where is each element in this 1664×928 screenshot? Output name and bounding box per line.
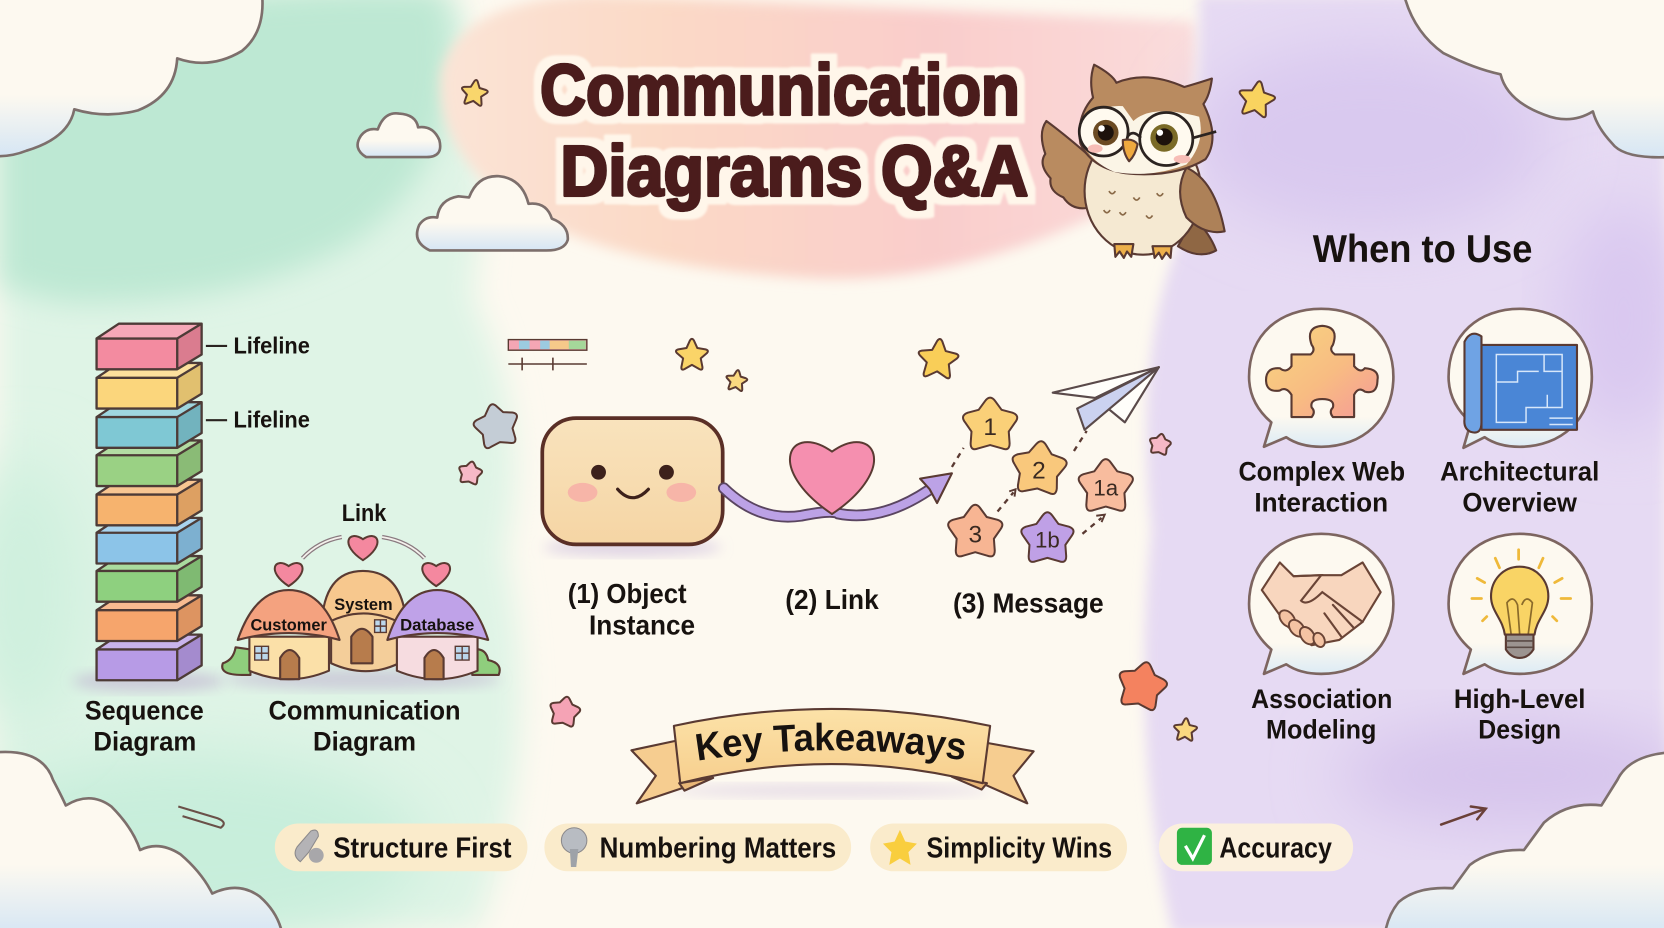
bubble: association modeling [1249, 534, 1393, 674]
part labels: (2) Link [785, 584, 879, 615]
owl right wing [1180, 168, 1225, 232]
numbered message stars: 1 [983, 414, 997, 441]
when-to-use labels [1238, 457, 1599, 745]
sequence diagram label [85, 696, 204, 756]
pill: structure first: Structure First [333, 832, 512, 864]
customer house [238, 590, 340, 679]
object instance character [542, 418, 723, 556]
when-to-use labels: Complex Web [1238, 457, 1405, 487]
key takeaways ribbon: Key Takeaways [696, 722, 965, 764]
database house [387, 590, 488, 679]
hearts and link arcs [275, 536, 450, 586]
sequence diagram label: Diagram [93, 726, 196, 756]
handshake [1262, 562, 1381, 649]
when-to-use labels: Architectural [1440, 457, 1599, 487]
pill: accuracy: Accuracy [1219, 832, 1332, 864]
when-to-use labels: High-Level [1454, 684, 1585, 714]
part labels: (1) Object [568, 578, 687, 609]
database house: Database [400, 616, 474, 634]
owl beak [1123, 140, 1138, 161]
when-to-use labels: Modeling [1266, 715, 1376, 745]
system house: System [334, 596, 393, 614]
small cloud [358, 113, 440, 157]
bubble: architectural overview [1449, 309, 1592, 448]
lifeline labels: Lifeline [233, 332, 310, 358]
part labels [568, 578, 1104, 641]
numbered message stars [948, 398, 1133, 562]
owl tail [1178, 218, 1216, 254]
communication diagram label [268, 696, 461, 756]
bubble: high-level design [1449, 534, 1592, 674]
when-to-use labels: Overview [1462, 488, 1577, 518]
numbered message stars: 1b [1035, 528, 1060, 553]
when-to-use labels: Association [1251, 684, 1392, 714]
pill: simplicity wins [870, 824, 1127, 871]
part labels: Instance [589, 610, 695, 641]
decorative stars [457, 78, 1277, 741]
panel: anatomy of a communication diagram [542, 367, 1159, 641]
part labels: (3) Message [953, 587, 1104, 618]
title: Diagrams Q&A [560, 132, 1028, 211]
owl feet [1114, 244, 1172, 259]
bubble: complex web interaction [1249, 309, 1393, 447]
customer house: Customer [250, 616, 327, 634]
mini sketch: lifeline strip [508, 340, 587, 370]
small arrow: bottom right [1441, 807, 1486, 825]
pill: numbering matters [544, 824, 851, 871]
numbered message stars: 1a [1093, 476, 1119, 501]
pill: simplicity wins: Simplicity Wins [926, 832, 1112, 864]
owl face [1080, 106, 1201, 174]
owl head [1079, 65, 1212, 174]
When to Use heading: When to Use [1313, 227, 1532, 271]
communication diagram label: Communication [268, 696, 461, 726]
panel: when to use [1238, 309, 1599, 745]
pill: numbering matters: Numbering Matters [600, 832, 836, 864]
lifeline labels: Lifeline [233, 407, 310, 433]
lifeline labels [206, 332, 310, 433]
owl chest feathers [1104, 191, 1163, 218]
corner cloud: top left [0, 0, 263, 156]
owl glasses and eyes [1079, 107, 1216, 166]
owl left wing [1042, 121, 1093, 208]
corner cloud: top right [1404, 0, 1664, 157]
key takeaways ribbon [630, 708, 1035, 804]
system house [322, 571, 406, 671]
corner cloud: bottom left [0, 752, 282, 928]
panel: sequence vs communication diagrams [72, 324, 501, 756]
owl body [1085, 127, 1201, 255]
owl mascot [1042, 65, 1225, 259]
small arrow: bottom left [178, 807, 224, 828]
dashed message arrows [952, 431, 1105, 534]
communication diagram label: Diagram [313, 726, 416, 756]
link arrow [724, 473, 952, 517]
pill: structure first [275, 824, 527, 871]
sequence diagram label: Sequence [85, 696, 204, 726]
corner cloud: bottom right [1385, 752, 1664, 928]
paper plane [1053, 367, 1159, 430]
heart: link [790, 442, 874, 514]
title [540, 52, 1028, 211]
large cloud [417, 176, 568, 250]
numbered message stars: 3 [968, 521, 982, 548]
sequence diagram block stack [72, 324, 225, 692]
takeaway pills [275, 824, 1353, 871]
title: Communication [540, 52, 1020, 131]
link label: Link [342, 500, 387, 527]
numbered message stars: 2 [1032, 458, 1046, 485]
pill: accuracy [1159, 824, 1353, 871]
houses [222, 571, 501, 690]
when-to-use labels: Design [1478, 715, 1561, 745]
when-to-use labels: Interaction [1254, 488, 1388, 518]
